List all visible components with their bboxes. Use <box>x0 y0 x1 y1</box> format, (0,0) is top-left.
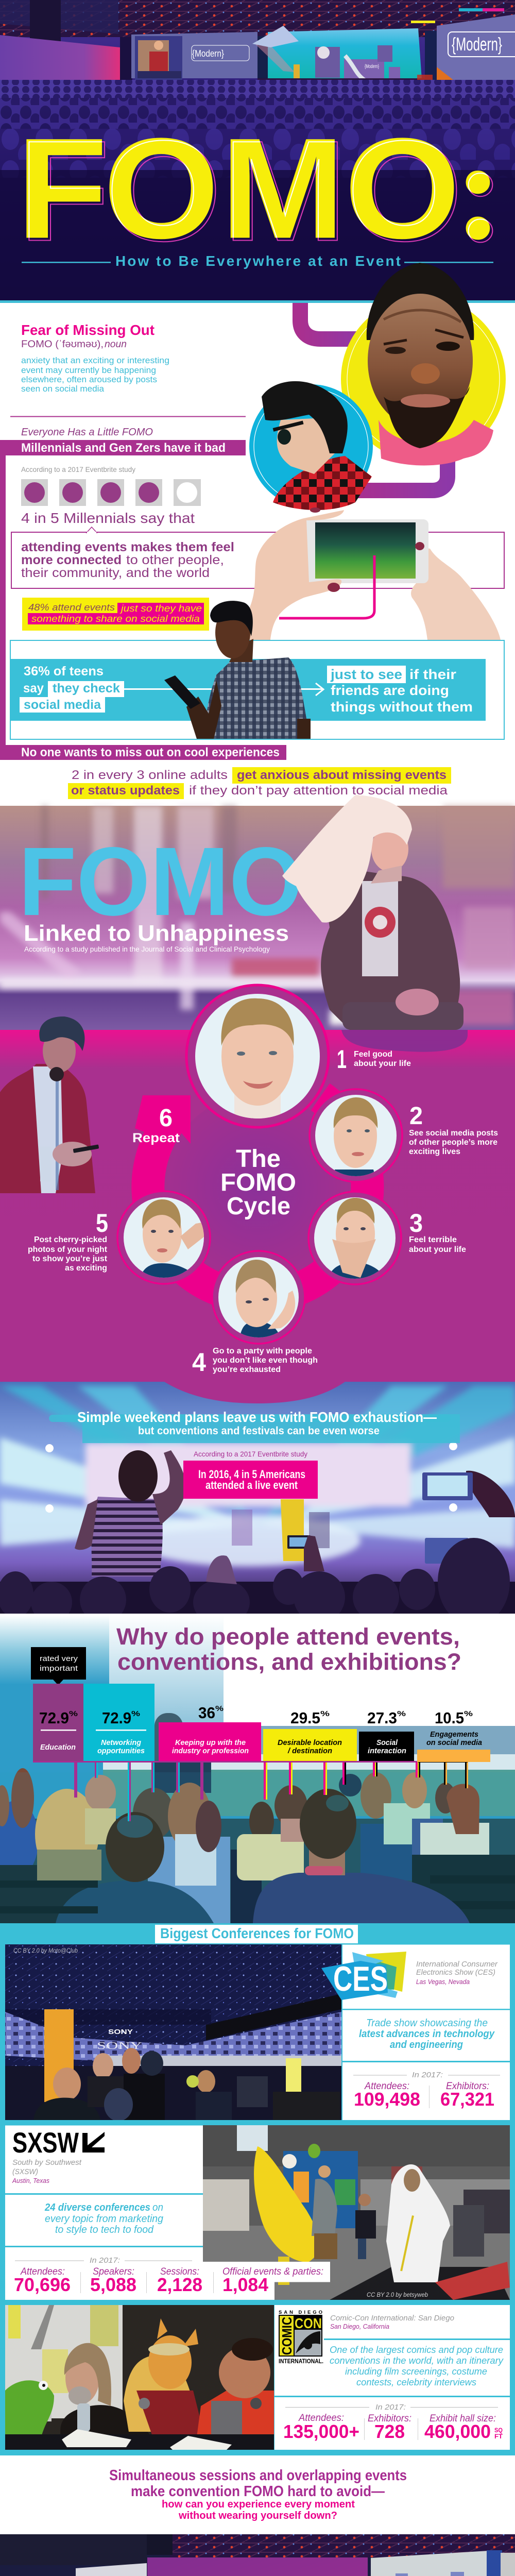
panel: CES details: Electronics Show (CES) <box>416 1968 495 1977</box>
stat: 2 in every 3 online adults: or status updates <box>71 784 180 798</box>
bar labels: Social <box>376 1738 398 1747</box>
stat: 4 in 5 millennials: 4 in 5 Millennials say that <box>21 510 195 526</box>
panel: CES details: Las Vegas, Nevada <box>416 1978 470 1986</box>
panel: CES details: latest advances in technology <box>359 2028 495 2040</box>
panel: hero conference photo: {Modern} <box>192 48 224 59</box>
panel: Comic-Con details: Exhibitors: <box>368 2413 411 2424</box>
panel: Comic-Con details: FT <box>494 2433 503 2440</box>
subtitle: How to Be Everywhere at an Event <box>115 253 401 269</box>
panel: SXSW details: to style to tech to food <box>55 2224 154 2235</box>
callout: 4 in 5 americans: attended a live event <box>205 1479 298 1492</box>
step 3 label: Feel terrible <box>409 1235 457 1244</box>
step 4 label <box>192 1347 318 1377</box>
step 2 label: of other people’s more <box>409 1138 497 1147</box>
panel: teens check social media band: say <box>23 681 44 696</box>
panel: Comic-Con details: contests, celebrity interviews <box>356 2377 476 2387</box>
stat: 2 in every 3 online adults: if they don’t pay attention to social media <box>189 784 448 798</box>
callout: attending events box: to other people, <box>126 553 224 567</box>
banner: simple weekend plans <box>49 1409 460 1443</box>
step 1 label: 1 <box>337 1045 347 1074</box>
panel: Comic-Con details: In 2017: <box>375 2403 406 2412</box>
panel: biggest conferences background <box>0 1923 515 2455</box>
callout: 48% attend events: just so they have <box>119 603 202 614</box>
panel: SXSW details: 24 diverse conferences <box>44 2202 150 2213</box>
title: FOMO <box>26 138 493 243</box>
decorative bracket: lower <box>355 453 448 490</box>
step 2 label: 2 <box>409 1103 423 1130</box>
bar labels <box>40 1730 482 1755</box>
panel: SXSW details: In 2017: <box>90 2256 120 2265</box>
bar labels: Education <box>40 1743 76 1752</box>
bar labels: Networking <box>101 1738 141 1747</box>
portrait: step 5 post photos <box>117 1191 210 1284</box>
panel: Comic-Con details: SQ <box>494 2427 503 2434</box>
banner: simple weekend plans: Simple weekend plans leave us with FOMO exhaustion— <box>77 1409 437 1425</box>
banner: millennials and gen zers <box>0 440 246 745</box>
panel: no mo FOMO photo <box>0 2534 515 2576</box>
panel: Comic-Con details: San Diego, California <box>330 2323 389 2330</box>
icon: CES logo: CES <box>333 1959 388 1998</box>
panel: SXSW details: Attendees: <box>20 2266 65 2277</box>
heading: the FOMO cycle: FOMO <box>220 1169 296 1196</box>
panel: FOMO cycle background <box>0 1030 515 1382</box>
panel: SXSW details: 5,088 <box>90 2274 136 2295</box>
step 6 label <box>132 1105 180 1145</box>
decorative bracket: upper <box>300 303 366 339</box>
panel: SXSW details: Official events & parties: <box>222 2266 323 2277</box>
panel: teens check social media band: they check <box>53 681 120 696</box>
bar labels: on social media <box>426 1738 482 1747</box>
panel: SXSW details <box>5 2126 330 2300</box>
bar values: 10.5 <box>435 1709 464 1727</box>
bar values: % <box>131 1709 140 1718</box>
title: FOMO: FOMO: <box>19 111 506 272</box>
photo: CES trade show floor <box>5 1944 341 2121</box>
panel: teens check social media band: friends are doing <box>331 683 449 698</box>
step 2 label: See social media posts <box>409 1129 498 1138</box>
text block: fear of missing out definition: elsewhere, often aroused by posts <box>21 375 157 384</box>
heading: biggest conferences: Biggest Conferences for FOMO <box>160 1925 354 1941</box>
callout: attending events box: attending events makes them feel <box>21 540 234 554</box>
heading: why do people attend events: Why do people attend events, <box>116 1623 460 1650</box>
bar values: % <box>397 1709 406 1718</box>
text block: fear of missing out definition: FOMO (ˈfəʊməʊ), <box>21 339 104 350</box>
bar labels: / destination <box>287 1747 332 1755</box>
photo: man in red jacket <box>0 1016 99 1193</box>
bar values: % <box>215 1704 224 1713</box>
icon: Comic-Con logo <box>279 2310 323 2365</box>
callout: 4 in 5 americans: In 2016, 4 in 5 Americans <box>198 1468 305 1481</box>
step 3 label <box>409 1209 466 1254</box>
bar labels: Engagements <box>430 1730 478 1739</box>
portrait: boy with sunglasses on blue circle <box>249 381 373 510</box>
text block: simultaneous sessions <box>109 2467 407 2521</box>
heading: FOMO linked to unhappiness: Linked to Unhappiness <box>24 921 289 946</box>
step 5 label <box>28 1209 108 1273</box>
panel: seminar audience photo <box>0 1615 515 1923</box>
panel: teens check social media band: if their <box>409 667 457 682</box>
panel: Comic-Con details: One of the largest comics and pop culture <box>330 2344 503 2355</box>
panel: SXSW details: Speakers: <box>93 2266 134 2277</box>
callout: rated very important: important <box>40 1664 78 1673</box>
text block: simultaneous sessions: without wearing yourself down? <box>178 2510 337 2521</box>
step 5 label: 5 <box>96 1209 108 1238</box>
step 1 label: about your life <box>354 1059 411 1068</box>
banner: no one wants to miss out: No one wants to miss out on cool experiences <box>21 745 280 759</box>
portrait: step 4 go to a party <box>212 1251 305 1344</box>
bar values: % <box>464 1709 473 1718</box>
heading: everyone has a little FOMO: Everyone Has a Little FOMO <box>21 427 153 438</box>
icon: Comic-Con logo: SAN DIEGO <box>279 2310 322 2315</box>
banner: simple weekend plans: but conventions and festivals can be even worse <box>138 1425 380 1437</box>
step 3 label: 3 <box>409 1209 423 1238</box>
panel: Comic-Con details: Comic-Con International: San Diego <box>330 2314 454 2323</box>
portrait: step 2 social media <box>310 1089 402 1182</box>
teal divider strip <box>0 300 515 303</box>
panel: teens check social media band: 36% of teens <box>24 664 104 679</box>
FOMO cycle bottom bump <box>164 1382 345 1403</box>
step 1 label <box>337 1045 411 1074</box>
heading: why do people attend events: conventions, and exhibitions? <box>117 1649 461 1675</box>
panel: concert photo <box>0 1382 515 1625</box>
panel: SXSW details: 2,128 <box>157 2274 202 2295</box>
heading: why do people attend events <box>116 1623 461 1675</box>
chart: 4 in 5 pictogram <box>21 479 201 506</box>
callout: attending events box <box>11 527 504 588</box>
text block: fear of missing out definition: anxiety that an exciting or interesting <box>21 356 169 365</box>
photo: SXSW expo floor: CC BY 2.0 by betsyweb <box>367 2291 428 2298</box>
icon: Comic-Con logo: COMIC <box>279 2317 295 2355</box>
callout: 48% attend events: 48% attend events <box>28 602 115 613</box>
panel: SXSW details: 70,696 <box>14 2274 71 2295</box>
step 4 label: Go to a party with people <box>213 1347 312 1355</box>
callout: 48% attend events: something to share on social media <box>31 614 200 624</box>
bar values: 72.9 <box>102 1709 131 1727</box>
step 4 label: you’re exhausted <box>213 1365 281 1374</box>
heading: the FOMO cycle <box>220 1145 296 1220</box>
step 2 label <box>409 1103 498 1156</box>
panel: hero conference photo <box>0 0 515 300</box>
text block: simultaneous sessions: how can you experience every moment <box>162 2499 355 2510</box>
icon: Comic-Con logo: CON <box>295 2315 322 2331</box>
step 5 label: as exciting <box>65 1264 107 1273</box>
step 2 label: exciting lives <box>409 1147 460 1156</box>
text block: fear of missing out definition: event may currently be happening <box>21 366 156 375</box>
panel: SXSW details: (SXSW) <box>12 2167 38 2176</box>
heading: FOMO linked to unhappiness: According to a study published in the Journal of Social and Clinical Psychology <box>24 945 270 953</box>
panel: CES details: 109,498 <box>354 2089 420 2110</box>
text block: fear of missing out definition: seen on social media <box>21 384 105 394</box>
panel: CES details: Attendees: <box>364 2081 409 2092</box>
photo: CES trade show floor: SONY <box>97 2040 142 2052</box>
panel: teens check social media band: just to see <box>330 667 402 682</box>
panel: teal teen stat outline <box>10 640 504 739</box>
panel: Comic-Con details: 460,000 <box>424 2421 491 2442</box>
panel: teens check social media band: things without them <box>331 699 473 715</box>
panel: CES details: International Consumer <box>416 1960 498 1969</box>
panel: teens check social media band <box>10 659 486 721</box>
panel: CES details: Trade show showcasing the <box>366 2018 488 2029</box>
step 5 label: photos of your night <box>28 1245 108 1254</box>
bar values: 29.5 <box>290 1709 320 1727</box>
photo: windblown blonde hair over the heading <box>282 795 412 923</box>
callout: attending events box: their community, and the world <box>21 566 210 580</box>
bar values: % <box>320 1709 330 1718</box>
step 4 label: you don’t like even though <box>213 1356 318 1365</box>
panel: FOMO linked to unhappiness photo <box>0 806 515 1030</box>
panel: Comic-Con details <box>274 2305 510 2450</box>
step 6 label: 6 <box>159 1105 173 1132</box>
step 4 label: 4 <box>192 1348 206 1377</box>
source note: According to a 2017 Eventbrite study <box>21 465 135 473</box>
step 5 label: to show you’re just <box>32 1255 108 1263</box>
panel: Comic-Con details: Exhibit hall size: <box>430 2413 496 2424</box>
photo: Comic-Con panel with muppets <box>5 2305 274 2450</box>
panel: CES details: and engineering <box>390 2039 463 2050</box>
bar labels: interaction <box>368 1747 406 1755</box>
callout: 4 in 5 americans <box>183 1461 318 1499</box>
photo: CES trade show floor: SONY <box>108 2028 133 2036</box>
bar values <box>39 1704 473 1727</box>
icon: hands holding phone <box>247 507 501 640</box>
panel: SXSW details: Austin, Texas <box>12 2177 49 2184</box>
portrait: worried man on yellow circle <box>341 263 506 466</box>
panel: CES details <box>321 1944 510 2120</box>
source note: eventbrite: According to a 2017 Eventbrite study <box>194 1450 307 1458</box>
step 3 label: about your life <box>409 1245 466 1254</box>
bar values: % <box>69 1709 78 1718</box>
panel: Comic-Con details: Attendees: <box>298 2413 344 2424</box>
photo: SXSW expo floor <box>203 2125 510 2300</box>
panel: SXSW details: 1,084 <box>222 2274 268 2295</box>
panel: Comic-Con details: 135,000+ <box>283 2421 359 2442</box>
step 1 label: Feel good <box>354 1050 392 1059</box>
text block: simultaneous sessions: make convention FOMO hard to avoid— <box>131 2483 385 2500</box>
panel: CES details: In 2017: <box>412 2071 443 2079</box>
panel: Comic-Con details: 728 <box>374 2421 405 2442</box>
step 6 label: Repeat <box>132 1131 180 1145</box>
stat: 2 in every 3 online adults: 2 in every 3 online adults <box>72 768 228 782</box>
drip legs <box>74 1761 468 1821</box>
step 5 label: Post cherry-picked <box>34 1235 107 1244</box>
panel: Comic-Con details: including film screenings, costume <box>345 2366 487 2377</box>
chart: FOMO cycle ring and portraits <box>117 985 402 1344</box>
icon: CES logo <box>321 1952 406 2000</box>
chart: why people attend bar chart <box>33 1684 490 1821</box>
panel: CES details: 67,321 <box>440 2089 494 2110</box>
bar labels: Desirable location <box>278 1738 342 1747</box>
bar values: 36 <box>198 1704 215 1722</box>
portrait: step 3 feel terrible <box>308 1192 401 1284</box>
title: FOMO: FOMO: <box>16 109 503 269</box>
callout: rated very important: rated very <box>40 1654 78 1663</box>
text block: simultaneous sessions: Simultaneous sessions and overlapping events <box>109 2467 407 2484</box>
bar values: 27.3 <box>367 1709 397 1727</box>
callout: rated very important <box>31 1647 86 1685</box>
panel: SXSW details: South by Southwest <box>12 2158 82 2167</box>
panel: SXSW details: Sessions: <box>160 2266 199 2277</box>
photo: CES trade show floor: CC BY 2.0 by Moto@Club <box>13 1947 78 1954</box>
panel: SXSW details: every topic from marketing <box>45 2213 163 2225</box>
photo: young man looking at phone <box>164 601 311 739</box>
stat: 2 in every 3 online adults: get anxious about missing events <box>237 768 447 782</box>
bar labels: Keeping up with the <box>175 1738 246 1747</box>
icon: SXSW logo: SXSW <box>12 2126 79 2159</box>
text block: fear of missing out definition <box>21 322 169 394</box>
panel: Comic-Con details: conventions in the world, with an itinerary <box>330 2355 504 2366</box>
bar values: 72.9 <box>39 1709 69 1727</box>
text block: fear of missing out definition: Fear of Missing Out <box>21 322 154 338</box>
panel: CES details: Exhibitors: <box>446 2081 489 2092</box>
text block: fear of missing out definition: noun <box>105 339 127 350</box>
heading: FOMO linked to unhappiness: FOMO <box>19 827 303 936</box>
heading: the FOMO cycle: The <box>236 1145 281 1173</box>
panel: SXSW details: on <box>152 2202 163 2213</box>
title: FOMO: FOMO: <box>19 111 506 272</box>
banner: millennials and gen zers: Millennials and Gen Zers have it bad <box>21 441 226 455</box>
seated audience <box>0 1768 515 1923</box>
panel: teens check social media band: social media <box>24 698 101 712</box>
callout: attending events box: more connected <box>21 553 122 567</box>
panel: hero conference photo: {Modern} <box>365 64 379 70</box>
bar labels: industry or profession <box>172 1747 249 1755</box>
portrait: step 1 feel good <box>186 985 329 1127</box>
callout: 48% attend events <box>22 598 209 631</box>
heading: the FOMO cycle: Cycle <box>227 1193 290 1220</box>
icon: Comic-Con logo: INTERNATIONAL. <box>279 2358 323 2365</box>
bar labels: opportunities <box>97 1747 145 1755</box>
stat: 2 in every 3 online adults <box>68 767 451 799</box>
heading: no mo FOMO <box>147 2557 368 2576</box>
